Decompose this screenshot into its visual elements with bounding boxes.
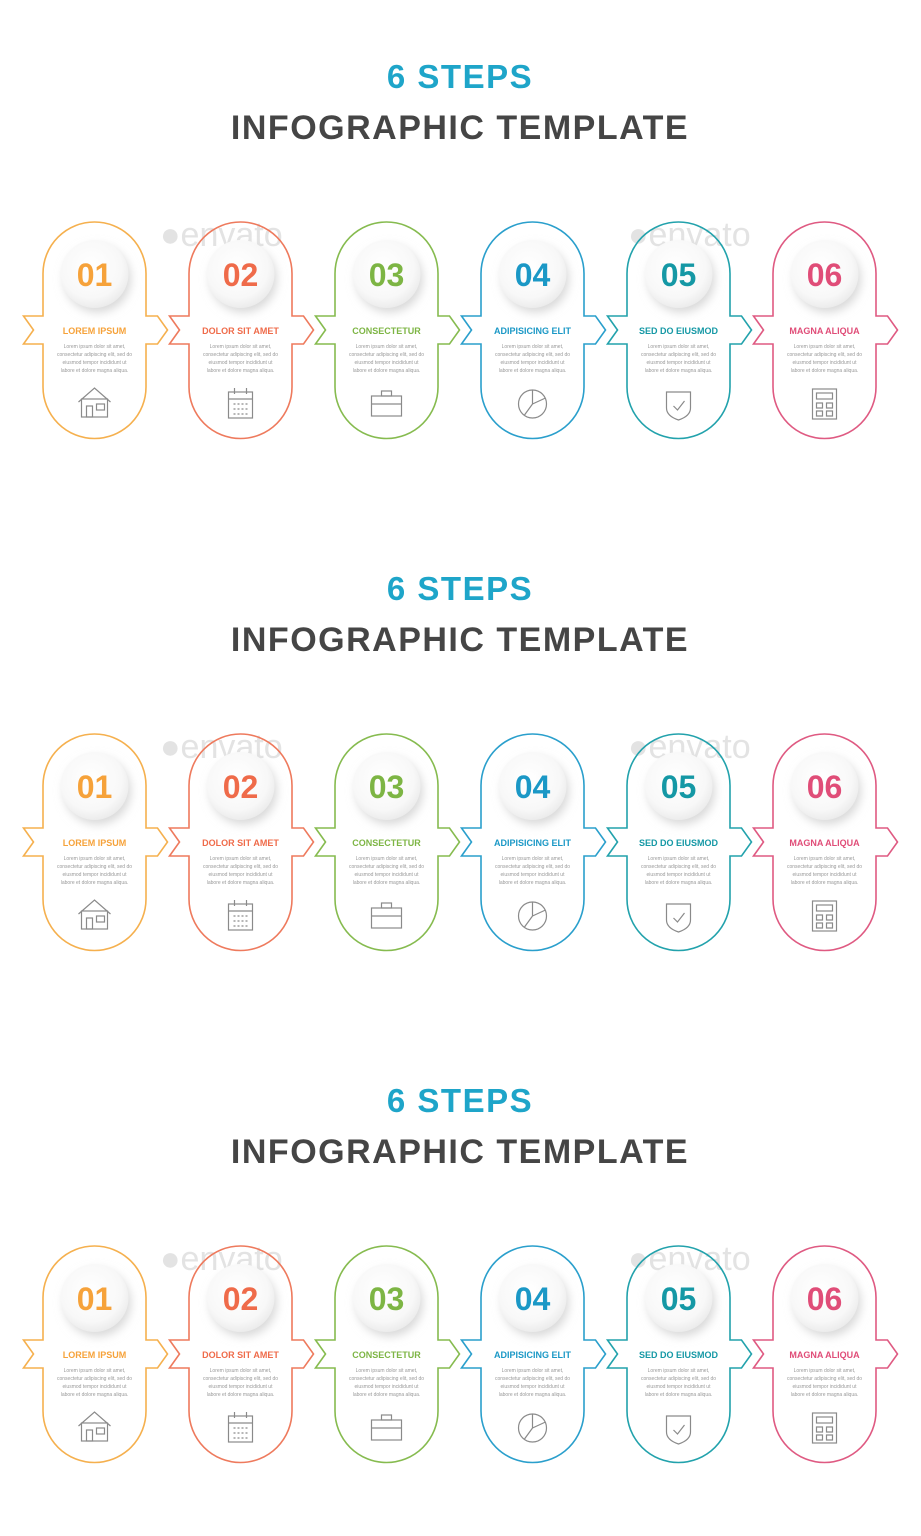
section 3 — [24, 1082, 898, 1462]
step 05: labore et dolore magna aliqua. — [645, 368, 712, 374]
step 04: 04 — [515, 257, 550, 293]
section 1 — [24, 58, 898, 438]
step 05: consectetur adipiscing elit, sed do — [641, 352, 716, 358]
step 03: consectetur adipiscing elit, sed do — [349, 352, 424, 358]
watermarks: ●envato — [628, 216, 751, 254]
step 01: LOREM IPSUM — [63, 326, 126, 336]
step 02: DOLOR SIT AMET — [202, 326, 279, 336]
step 06: 06 — [807, 257, 842, 293]
step 03: eiusmod tempor incididunt ut — [355, 360, 419, 366]
step 01: Lorem ipsum dolor sit amet, — [64, 344, 125, 350]
step 03: 03 — [369, 257, 404, 293]
step 01: labore et dolore magna aliqua. — [61, 368, 128, 374]
watermarks — [160, 216, 751, 254]
step 04: ADIPISICING ELIT — [494, 326, 572, 336]
step 05 — [608, 222, 752, 438]
step 04: Lorem ipsum dolor sit amet, — [502, 344, 563, 350]
step 02: labore et dolore magna aliqua. — [207, 368, 274, 374]
watermarks: ●envato — [160, 216, 283, 254]
step 03: CONSECTETUR — [352, 326, 421, 336]
title: INFOGRAPHIC TEMPLATE — [231, 109, 689, 147]
step 01: 01 — [77, 257, 112, 293]
step 05: 05 — [661, 257, 696, 293]
step 06: labore et dolore magna aliqua. — [791, 368, 858, 374]
section 2 — [24, 570, 898, 950]
step 06: consectetur adipiscing elit, sed do — [787, 352, 862, 358]
title: 6 STEPS — [387, 58, 533, 95]
step 06 — [754, 222, 898, 438]
step 01 — [24, 222, 168, 438]
step 01: eiusmod tempor incididunt ut — [63, 360, 127, 366]
step 04 — [462, 222, 606, 438]
step 04: consectetur adipiscing elit, sed do — [495, 352, 570, 358]
step 05: eiusmod tempor incididunt ut — [647, 360, 711, 366]
step 03: labore et dolore magna aliqua. — [353, 368, 420, 374]
step 05: Lorem ipsum dolor sit amet, — [648, 344, 709, 350]
step 06: Lorem ipsum dolor sit amet, — [794, 344, 855, 350]
title — [231, 58, 689, 147]
step 03 — [316, 222, 460, 438]
step 06: eiusmod tempor incididunt ut — [793, 360, 857, 366]
step 06: MAGNA ALIQUA — [789, 326, 860, 336]
step 03: Lorem ipsum dolor sit amet, — [356, 344, 417, 350]
step 01: consectetur adipiscing elit, sed do — [57, 352, 132, 358]
step 02: Lorem ipsum dolor sit amet, — [210, 344, 271, 350]
step 02: 02 — [223, 257, 258, 293]
step 04: eiusmod tempor incididunt ut — [501, 360, 565, 366]
step 02: eiusmod tempor incididunt ut — [209, 360, 273, 366]
step 02: consectetur adipiscing elit, sed do — [203, 352, 278, 358]
step 05: SED DO EIUSMOD — [639, 326, 719, 336]
step 04: labore et dolore magna aliqua. — [499, 368, 566, 374]
step 02 — [170, 222, 314, 438]
